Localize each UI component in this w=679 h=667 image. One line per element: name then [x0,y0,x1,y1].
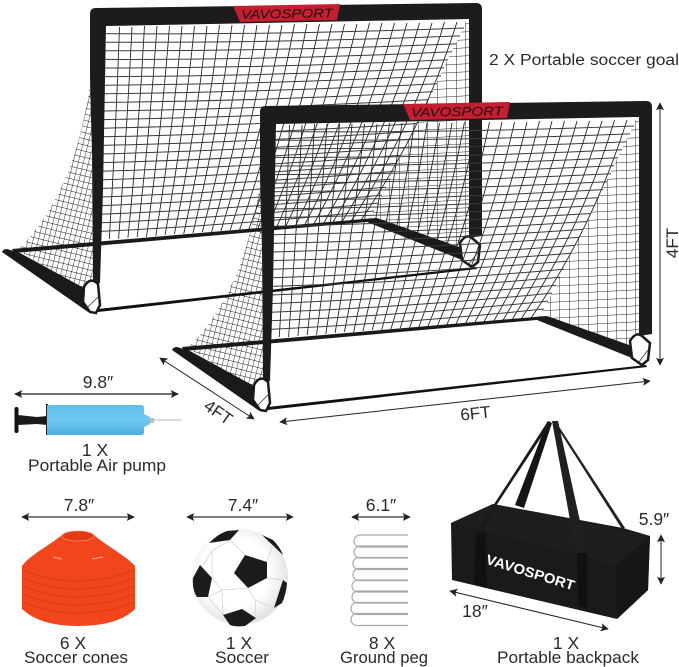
net: left side panel [18,75,93,292]
front ground bar [98,267,477,312]
logo text: back goal: VAVOSPORT [241,6,335,22]
dimension: 18 inch [450,591,608,629]
dimension: goal width 6FT [280,381,650,425]
backpack item: 1 X [553,633,579,653]
goal quantity label: 2 X Portable soccer goal [489,52,679,69]
rear ground bar [12,218,378,253]
dimension: goal depth 4FT [160,358,254,429]
soccer ball item: Soccer [215,649,270,667]
soccer cones item [22,495,135,667]
logo text: front goal: VAVOSPORT [411,104,505,120]
backpack item: 5.9″ [639,509,669,529]
straps behind [515,422,552,508]
ground peg item: 6.1″ [366,495,396,515]
bag logo: VAVOSPORT [484,551,577,593]
air pump item: 1 X [82,440,108,460]
icon: backpack [451,421,650,619]
soccer ball item [187,495,293,667]
backpack item: Portable backpack [497,649,640,667]
dimension: 5.9 inch [660,535,662,584]
soccer ball item: 1 X [226,633,252,653]
rear right diagonal bar [367,218,462,260]
right foot loop [460,236,480,267]
dimension: 7.8 inch [22,516,134,518]
air pump item: 9.8″ [83,372,113,392]
icon: cone stack [22,531,135,626]
icon: soccer ball [192,529,288,626]
net: main back panel verticals [109,22,457,239]
back soccer goal [2,3,482,313]
soccer cones item: 6 X [60,633,86,653]
ground peg item: 8 X [369,633,395,653]
straps in front [474,532,487,588]
dimension: 9.8 inch [15,393,178,395]
net: main back panel horizontals [100,28,464,231]
front soccer goal [172,101,652,411]
ground peg item: Ground peg [340,649,428,667]
soccer cones item: Soccer cones [24,649,128,667]
soccer cones item: 7.8″ [64,495,94,515]
dimension: 7.4 inch [187,516,293,518]
icon: ground pegs [351,535,408,626]
dimension: goal depth 4FT: 4FT [200,396,236,429]
left foot loop [83,281,100,313]
red logo patch [233,4,340,22]
air pump item: Portable Air pump [28,457,166,475]
soccer ball item: 7.4″ [228,495,258,515]
dimension: goal width 6FT: 6FT [459,403,491,425]
bag body [451,504,650,619]
net: right side panel [370,22,470,250]
dimension: 6.1 inch [352,516,410,518]
icon: air pump [14,404,182,435]
rear left diagonal bar [2,249,92,313]
ground peg item [340,495,428,667]
frame: top bar and posts [90,3,482,283]
air pump item [14,372,182,475]
backpack item: 18″ [462,601,488,621]
backpack item [450,421,669,667]
